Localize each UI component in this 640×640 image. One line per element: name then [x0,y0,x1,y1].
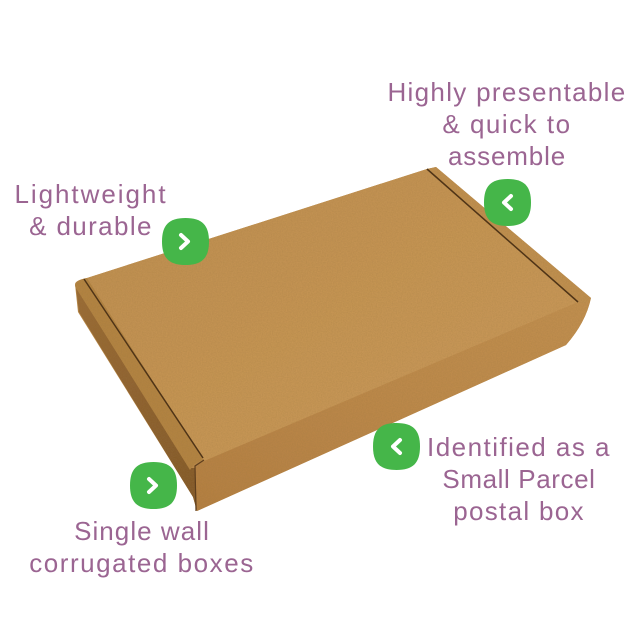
fold lines [84,169,578,458]
icon: chevron right single wall [130,462,177,509]
label: single wall: Single wall [74,516,210,546]
label: lightweight [14,179,168,241]
label: single wall [29,516,255,578]
icon: chevron right lightweight [162,218,209,265]
icon: chevron left identified [373,423,420,470]
label: identified [427,432,611,526]
box silhouette [75,167,591,511]
label: identified: Identified as a [427,432,611,462]
left flap [75,278,205,470]
label: identified: Small Parcel [442,464,596,494]
label: highly presentable: Highly presentable [387,77,627,107]
label: identified: postal box [453,496,585,526]
icon: chevron left presentable [484,179,531,226]
label: highly presentable: assemble [448,141,566,171]
right flap [427,167,591,303]
label: highly presentable [387,77,627,171]
label: highly presentable: & quick to [442,109,572,139]
left side panel [76,288,198,511]
label: lightweight: & durable [29,211,153,241]
top face [87,169,578,461]
label: lightweight: Lightweight [14,179,168,209]
label: single wall: corrugated boxes [29,548,255,578]
front panel [195,300,590,511]
